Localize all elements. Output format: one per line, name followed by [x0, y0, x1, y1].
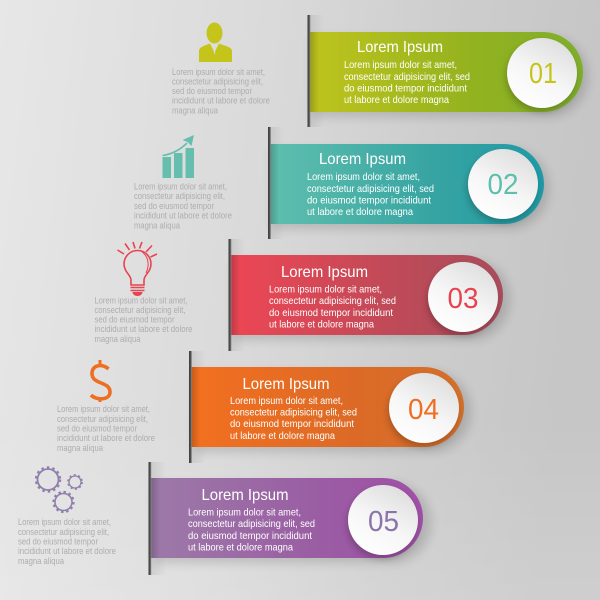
- fold slit 3: [228, 239, 232, 351]
- text block: step 5 description: sed do eiusmod tempor: [18, 536, 98, 546]
- ribbon band 5: [150, 478, 423, 558]
- body text 4: consectetur adipisicing elit, sed: [230, 408, 357, 418]
- text block: step 3 description: incididunt ut labore et dolore: [94, 323, 192, 334]
- body text 4: do eiusmod tempor incididunt: [230, 419, 354, 430]
- title 2: Lorem Ipsum: [319, 151, 406, 168]
- text block: step 2 description: sed do eiusmod tempor: [134, 200, 214, 211]
- number badge 1: 01: [529, 58, 557, 90]
- body text 1: Lorem ipsum dolor sit amet,: [344, 60, 457, 71]
- title 4: Lorem Ipsum: [242, 376, 330, 393]
- text block: step 2 description: Lorem ipsum dolor sit amet,: [134, 180, 227, 192]
- body text 1: consectetur adipisicing elit, sed: [344, 72, 470, 83]
- title 5: Lorem Ipsum: [202, 487, 288, 504]
- body text 5: consectetur adipisicing elit, sed: [188, 519, 315, 530]
- text block: step 4 description: sed do eiusmod tempor: [57, 422, 137, 434]
- text block: step 2 description: consectetur adipisicing elit,: [134, 190, 225, 201]
- body text 4: Lorem ipsum dolor sit amet,: [230, 396, 343, 407]
- text block: step 4 description: Lorem ipsum dolor sit amet,: [57, 403, 150, 414]
- fold slit 2: [268, 127, 271, 239]
- body text 3: consectetur adipisicing elit, sed: [269, 296, 396, 307]
- fold slit 4: [189, 351, 192, 463]
- text block: step 1 description: sed do eiusmod tempor: [172, 85, 252, 96]
- body text 5: Lorem ipsum dolor sit amet,: [188, 508, 301, 518]
- body text 3: Lorem ipsum dolor sit amet,: [269, 284, 382, 296]
- text block: step 4 description: magna aliqua: [57, 442, 104, 453]
- title 1: Lorem Ipsum: [357, 39, 443, 56]
- icon: dollar sign: [91, 360, 110, 402]
- body text 2: consectetur adipisicing elit, sed: [307, 184, 434, 195]
- body text 1: [344, 60, 470, 106]
- body text 5: do eiusmod tempor incididunt: [188, 531, 312, 542]
- text block: step 4 description: [57, 403, 155, 453]
- number badge 4: 04: [408, 394, 439, 426]
- body text 2: [307, 172, 434, 218]
- body text 2: do eiusmod tempor incididunt: [307, 196, 431, 206]
- icon: gears: [36, 468, 82, 512]
- ribbon band 3: [230, 255, 503, 335]
- text block: step 2 description: incididunt ut labore et dolore: [134, 210, 232, 220]
- body text 3: [269, 284, 396, 330]
- text block: step 1 description: Lorem ipsum dolor sit amet,: [172, 66, 265, 77]
- number badge 2: [468, 149, 538, 219]
- icon: light bulb: [118, 242, 157, 296]
- text block: step 4 description: consectetur adipisicing elit,: [57, 413, 148, 424]
- text block: step 4 description: incididunt ut labore et dolore: [57, 432, 155, 443]
- text block: step 3 description: sed do eiusmod tempor: [94, 314, 174, 324]
- number badge 3: 03: [448, 283, 478, 315]
- text block: step 5 description: incididunt ut labore et dolore: [18, 545, 116, 556]
- text block: step 3 description: Lorem ipsum dolor sit amet,: [94, 294, 188, 306]
- body text 4: ut labore et dolore magna: [230, 431, 335, 442]
- fold slit 5: [148, 462, 152, 575]
- panel: step 1 ribbon: [308, 15, 588, 127]
- title 3: Lorem Ipsum: [281, 264, 368, 281]
- body text 4: [230, 396, 357, 442]
- body text 2: Lorem ipsum dolor sit amet,: [307, 172, 420, 183]
- number badge 5: [348, 485, 418, 555]
- ribbon band 4: [190, 367, 464, 447]
- panel: step 4 ribbon: [189, 351, 471, 463]
- text block: step 1 description: incididunt ut labore et dolore: [172, 94, 270, 106]
- text block: step 2 description: [134, 180, 232, 230]
- text block: step 3 description: [94, 294, 192, 344]
- number badge 4: [389, 373, 459, 443]
- panel: step 3 ribbon: [228, 239, 510, 351]
- body text 5: ut labore et dolore magna: [188, 542, 293, 554]
- body text 3: ut labore et dolore magna: [269, 320, 374, 330]
- text block: step 5 description: [18, 516, 116, 566]
- number badge 1: [507, 38, 577, 108]
- body text 1: ut labore et dolore magna: [344, 95, 449, 106]
- body text 1: do eiusmod tempor incididunt: [344, 84, 467, 94]
- text block: step 5 description: Lorem ipsum dolor sit amet,: [18, 516, 111, 527]
- text block: step 5 description: consectetur adipisicing elit,: [18, 526, 109, 537]
- text block: step 1 description: consectetur adipisicing elit,: [172, 76, 263, 86]
- body text 2: ut labore et dolore magna: [307, 207, 413, 218]
- ribbon band 1: [309, 32, 583, 112]
- icon: person: [199, 22, 232, 62]
- fold slit 1: [308, 15, 310, 127]
- icon: bar chart with arrow: [162, 135, 194, 178]
- number badge 3: [428, 262, 498, 332]
- ribbon band 2: [269, 144, 544, 224]
- panel: step 2 ribbon: [268, 127, 549, 239]
- text block: step 1 description: magna aliqua: [172, 104, 219, 116]
- text block: step 2 description: magna aliqua: [134, 220, 181, 230]
- text block: step 1 description: [172, 66, 270, 116]
- body text 5: [188, 508, 315, 554]
- text block: step 3 description: magna aliqua: [94, 333, 141, 344]
- number badge 5: 05: [368, 506, 399, 538]
- panel: step 5 ribbon: [148, 462, 431, 575]
- text block: step 3 description: consectetur adipisicing elit,: [94, 304, 186, 315]
- number badge 2: 02: [488, 169, 518, 201]
- text block: step 5 description: magna aliqua: [18, 555, 65, 566]
- body text 3: do eiusmod tempor incididunt: [269, 308, 393, 319]
